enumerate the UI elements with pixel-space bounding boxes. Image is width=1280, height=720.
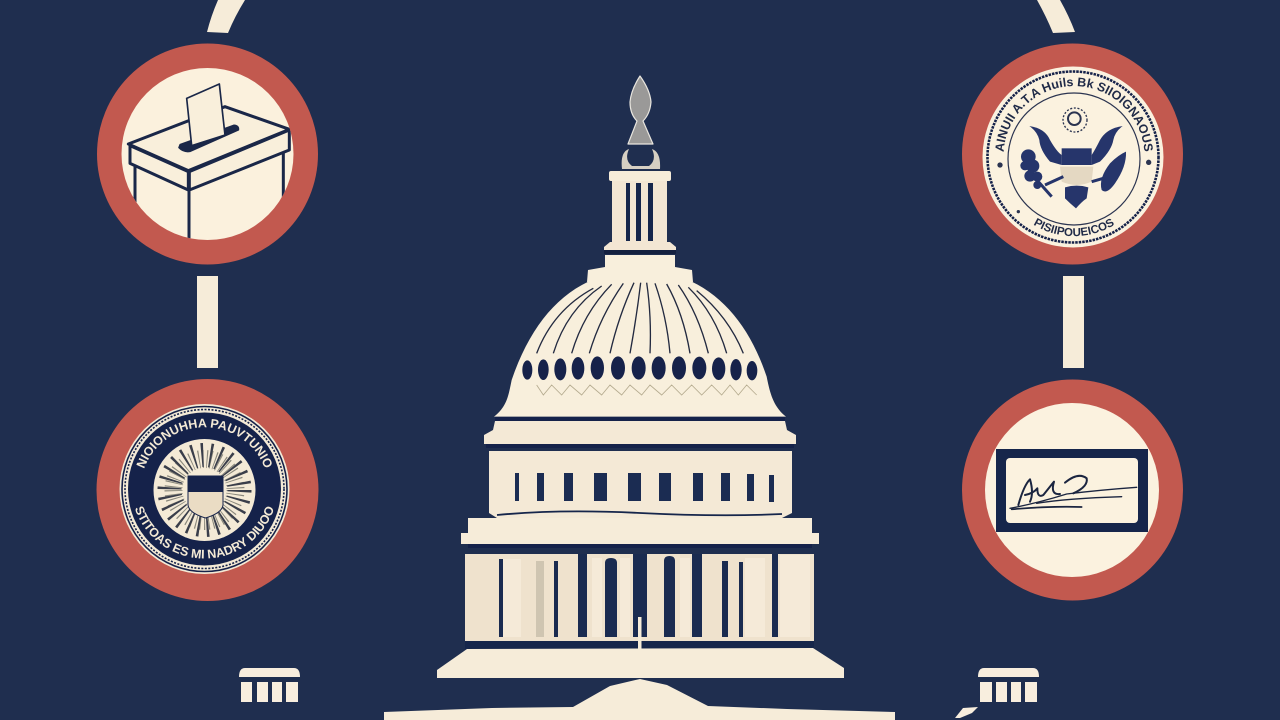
dome ribs (537, 283, 743, 353)
icon: eagle seal (962, 44, 1183, 264)
icon: signature document (962, 380, 1183, 600)
eagle emblem (997, 108, 1151, 213)
lower wing pediment (384, 679, 895, 720)
seal shield (188, 476, 223, 518)
connector: top left arc (207, 0, 245, 33)
seal lettering (136, 418, 274, 558)
colonnade (465, 554, 814, 641)
connector: top right arc (1037, 0, 1075, 33)
icon: round seal with shield (96, 379, 318, 601)
seal lettering: STITOAS ES MI NADRY DIUOO (136, 506, 274, 558)
icon: ballot box (97, 44, 318, 264)
upper cornice (484, 417, 796, 448)
icon: small right portico (955, 668, 1039, 718)
portico base (437, 617, 844, 678)
seal lettering (995, 78, 1153, 236)
connector: right vertical bar (1063, 276, 1084, 368)
dome windows (522, 356, 757, 380)
seal sunburst (170, 455, 240, 525)
icon: small left portico (239, 668, 300, 702)
seal lettering: PISIIPOUEICOS (1034, 218, 1114, 236)
seal lettering: NIOIONUHHA PAUVTUNIO (136, 418, 272, 468)
main dome (494, 282, 786, 417)
capitol building (384, 76, 895, 720)
connector: left vertical bar (197, 276, 218, 368)
lower cornice (461, 518, 819, 548)
dome finial (622, 76, 660, 169)
dome lantern (587, 171, 693, 282)
handwritten signature (1010, 476, 1137, 509)
seal lettering: AINUII A.T.A Huils Bk SIIOIGNAOUS (995, 78, 1153, 152)
drum with windows (489, 451, 792, 518)
